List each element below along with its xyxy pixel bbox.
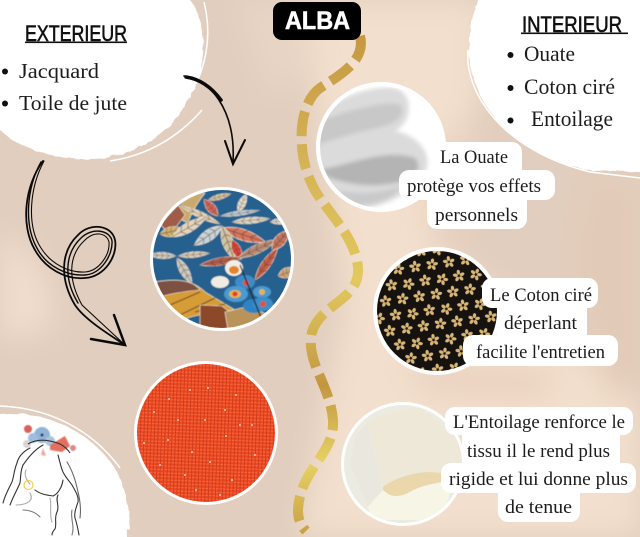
label: coton cire: déperlant <box>504 313 578 334</box>
label: la ouate: protège vos effets <box>407 176 541 197</box>
brush blob: interieur <box>468 0 640 178</box>
badge: ALBA: ALBA <box>285 7 350 35</box>
label: entoilage: de tenue <box>505 497 572 518</box>
illustration: woman with flower crown <box>3 425 80 535</box>
list: interieur: Coton ciré <box>524 74 615 99</box>
list: interieur: Entoilage <box>531 106 613 131</box>
label: coton cire: Le Coton ciré <box>490 285 592 306</box>
photo: coton cire <box>373 247 501 375</box>
photo: toile de jute <box>134 361 278 505</box>
photo: ouate <box>316 82 446 212</box>
label: entoilage: L'Entoilage renforce le <box>453 412 625 433</box>
badge: ALBA <box>273 2 361 40</box>
heading: interieur: INTERIEUR <box>522 12 622 37</box>
label: coton cire: facilite l'entretien <box>476 342 605 363</box>
brush blob: exterieur <box>0 0 208 161</box>
label: entoilage <box>441 407 636 522</box>
photo: jacquard fabric <box>148 187 299 332</box>
photo: entoilage <box>341 402 465 526</box>
heading: exterieur: EXTERIEUR <box>25 21 127 46</box>
label: entoilage: rigide et lui donne plus <box>449 469 628 490</box>
label: entoilage: tissu il le rend plus <box>467 441 610 462</box>
list: exterieur <box>2 59 127 115</box>
arrow: looping to toile de jute <box>26 161 125 345</box>
list: exterieur: Toile de jute <box>19 91 127 115</box>
label: coton cire <box>463 278 618 366</box>
brush blob: portrait background <box>0 406 130 537</box>
label: la ouate: La Ouate <box>440 147 508 168</box>
label: la ouate: personnels <box>435 205 518 226</box>
list: exterieur: Jacquard <box>19 59 100 83</box>
arrow: exterieur to jacquard <box>184 76 245 164</box>
list: interieur: Ouate <box>524 41 575 66</box>
label: la ouate <box>399 142 555 229</box>
list: interieur <box>508 41 615 131</box>
gold dashed path <box>298 36 361 531</box>
